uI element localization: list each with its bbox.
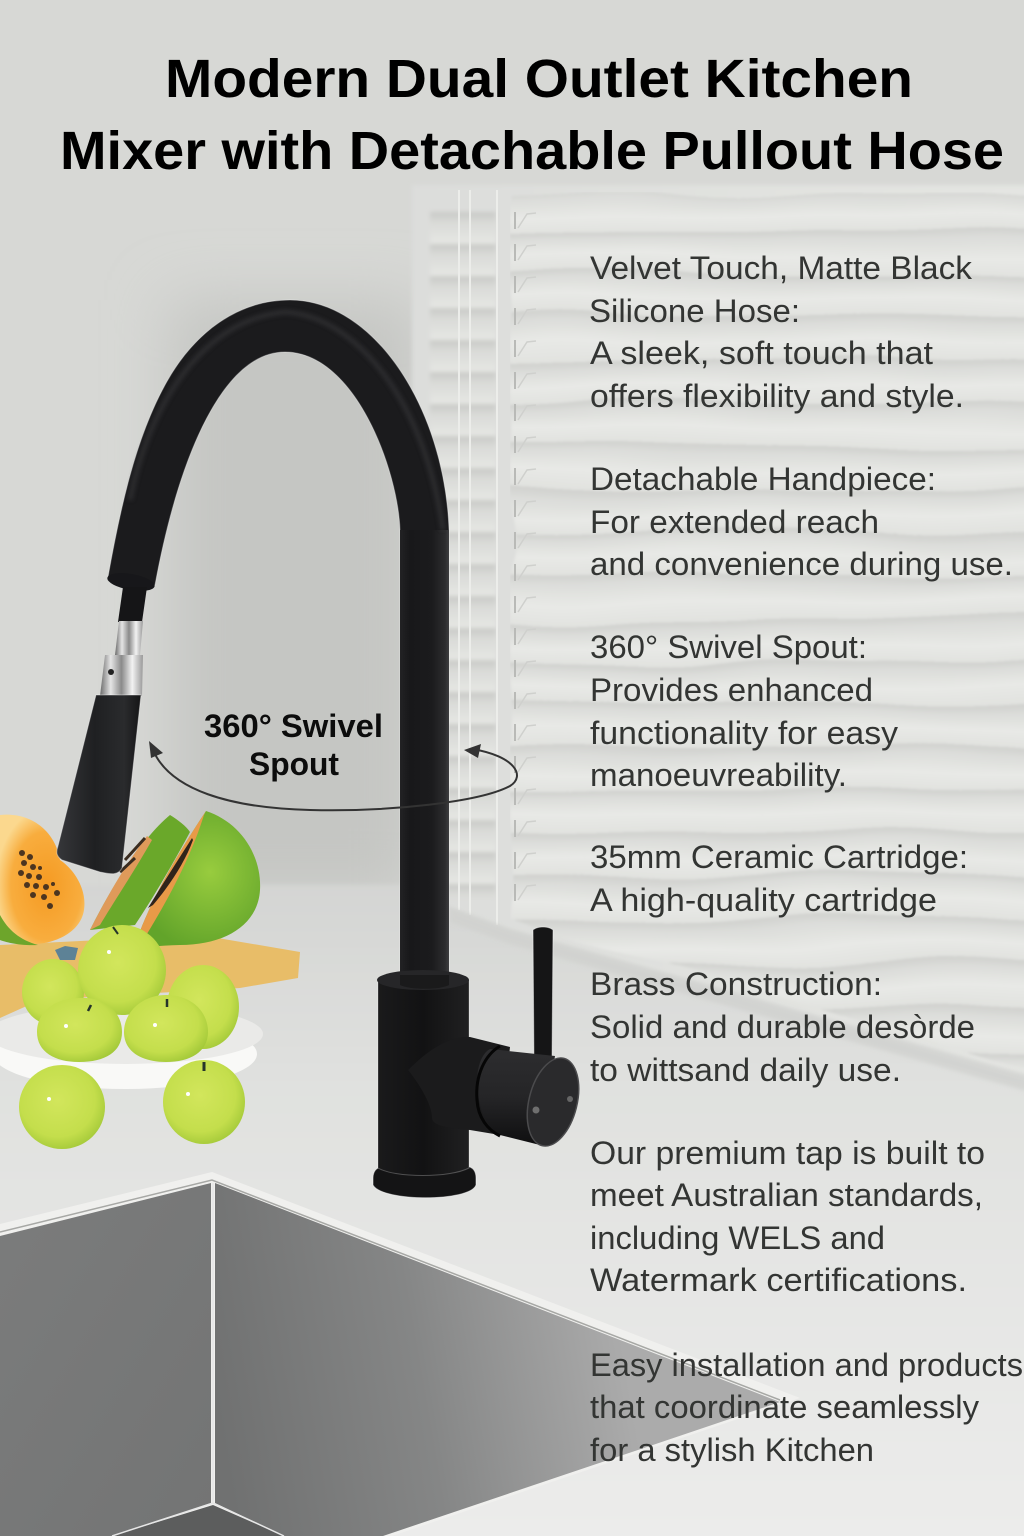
apple back left <box>22 959 84 1025</box>
handle arm <box>408 1037 510 1135</box>
feature: silicone hose: offers flexibility and style. <box>590 378 964 414</box>
feature: swivel spout: Provides enhanced <box>590 672 873 708</box>
apple front right <box>124 995 208 1062</box>
apple lower left <box>19 1065 105 1149</box>
feature: silicone hose <box>589 250 973 414</box>
sink floor <box>112 1505 284 1536</box>
still life: fruit <box>0 811 300 1149</box>
feature: brass construction: Solid and durable desòrde <box>590 1009 975 1045</box>
feature: detachable handpiece <box>590 461 1013 582</box>
background: countertop <box>0 885 1024 1536</box>
chrome collar <box>100 655 143 696</box>
feature: detachable handpiece: and convenience during use. <box>590 546 1013 582</box>
swivel label <box>204 708 383 782</box>
feature: easy installation: Easy installation and products <box>590 1347 1023 1383</box>
feature: ceramic cartridge <box>590 839 968 918</box>
title: Mixer with Detachable Pullout Hose <box>60 121 1004 181</box>
plate <box>0 1004 263 1089</box>
apple back right <box>167 965 239 1049</box>
neck <box>118 587 147 622</box>
feature: detachable handpiece: For extended reach <box>590 504 879 540</box>
hose end <box>106 570 156 594</box>
faucet <box>57 300 587 1198</box>
feature: silicone hose: A sleek, soft touch that <box>590 335 933 371</box>
sink edge <box>0 1172 800 1536</box>
feature: swivel spout: manoeuvreability. <box>590 757 847 793</box>
feature: silicone hose: Velvet Touch, Matte Black <box>590 250 973 286</box>
feature: australian standards <box>590 1135 985 1298</box>
cutting board <box>0 935 300 1018</box>
feature: easy installation: for a stylish Kitchen <box>590 1432 874 1468</box>
base body <box>377 970 469 1176</box>
apple lower right <box>163 1060 245 1144</box>
papaya seeds <box>18 850 60 909</box>
blue fragment <box>55 946 78 960</box>
apple front left <box>37 998 122 1062</box>
feature: swivel spout <box>590 629 898 793</box>
hose highlight <box>130 312 443 530</box>
base flange <box>373 1166 476 1198</box>
sink <box>0 1172 800 1536</box>
feature: australian standards: including WELS and <box>590 1220 885 1256</box>
feature: brass construction: Brass Construction: <box>590 966 882 1002</box>
background: window blinds <box>412 185 1024 1085</box>
handpiece <box>57 695 141 874</box>
handle knob <box>477 1049 555 1145</box>
papaya <box>0 815 84 944</box>
melon slice <box>90 815 190 930</box>
feature: ceramic cartridge: A high-quality cartridge <box>590 882 937 918</box>
feature: easy installation: that coordinate seamlessly <box>590 1389 979 1425</box>
swivel label: Spout <box>249 746 339 782</box>
title: Modern Dual Outlet Kitchen <box>165 49 913 109</box>
swivel arrow <box>149 741 517 810</box>
column shading <box>400 530 449 985</box>
apple top <box>78 925 166 1015</box>
feature: australian standards: meet Australian standards, <box>590 1177 983 1213</box>
handle end disc <box>519 1053 587 1151</box>
gooseneck spout and silicone hose <box>108 300 449 985</box>
background: wall <box>0 0 1024 1000</box>
mixer lever <box>533 927 553 1065</box>
feature: detachable handpiece: Detachable Handpiece: <box>590 461 936 497</box>
feature: easy installation <box>590 1347 1023 1468</box>
feature: australian standards: Our premium tap is built to <box>590 1135 985 1171</box>
feature: brass construction: to wittsand daily use. <box>590 1052 901 1088</box>
sink left wall <box>0 1183 211 1536</box>
sink right wall <box>215 1183 780 1536</box>
melon half <box>135 811 260 946</box>
feature: silicone hose: Silicone Hose: <box>589 293 800 329</box>
feature: swivel spout: 360° Swivel Spout: <box>590 629 867 665</box>
title <box>60 49 1004 181</box>
feature: ceramic cartridge: 35mm Ceramic Cartridge: <box>590 839 968 875</box>
swivel label: 360° Swivel <box>204 708 383 744</box>
feature: brass construction <box>590 966 975 1088</box>
feature: australian standards: Watermark certifications. <box>590 1262 967 1298</box>
feature: swivel spout: functionality for easy <box>590 715 898 751</box>
chrome sleeve <box>115 621 143 655</box>
